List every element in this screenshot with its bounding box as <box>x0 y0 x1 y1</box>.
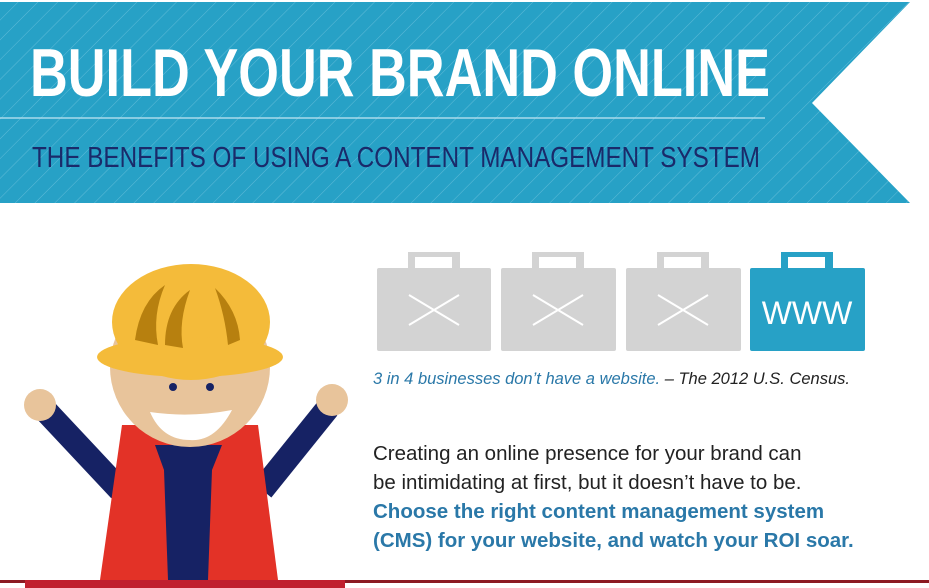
bottom bar <box>0 580 929 583</box>
banner <box>0 2 910 203</box>
subtitle: THE BENEFITS OF USING A CONTENT MANAGEMENT SYSTEM <box>32 142 760 174</box>
census stat: 3 in 4 businesses don’t have a website. – The 2012 U.S. Census. <box>373 370 850 388</box>
body text: Choose the right content management system <box>373 500 824 523</box>
body text: Creating an online presence for your brand can <box>373 442 802 465</box>
briefcases <box>377 252 865 351</box>
briefcases: WWW <box>762 295 853 331</box>
body text: (CMS) for your website, and watch your ROI soar. <box>373 529 854 552</box>
body text: be intimidating at first, but it doesn’t have to be. <box>373 471 801 494</box>
body text <box>373 442 854 552</box>
character <box>24 264 348 580</box>
